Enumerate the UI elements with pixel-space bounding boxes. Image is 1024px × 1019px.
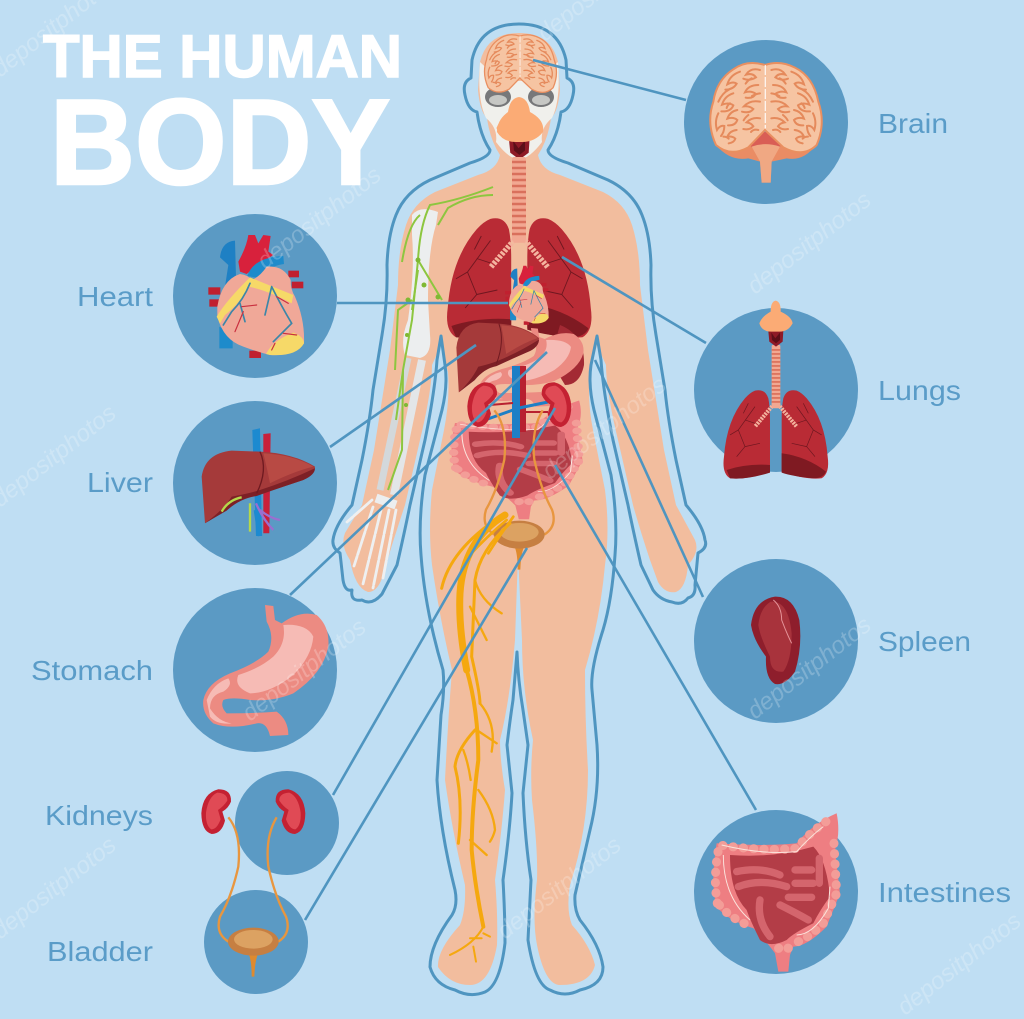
mini heart xyxy=(505,266,549,325)
icon: liver xyxy=(202,428,315,536)
arm skeleton xyxy=(347,209,438,588)
watermark: depositphotos xyxy=(742,186,876,300)
watermark: depositphotos xyxy=(742,611,876,725)
title: BODY xyxy=(50,74,390,210)
icon circles xyxy=(173,40,858,994)
label: Bladder: Bladder xyxy=(47,936,153,967)
watermark: depositphotos xyxy=(252,161,386,275)
label: Liver: Liver xyxy=(87,467,153,498)
icon: kidneys and bladder xyxy=(201,789,305,977)
icon: spleen xyxy=(751,597,800,684)
mini intestines xyxy=(452,400,583,519)
label: Intestines: Intestines xyxy=(878,877,1011,908)
body figure xyxy=(333,24,706,995)
body outline xyxy=(333,24,706,995)
major blood vessels xyxy=(485,366,548,438)
body skin xyxy=(343,33,696,985)
icon: stomach xyxy=(203,605,329,736)
leader lines xyxy=(290,60,756,920)
icon: brain xyxy=(710,63,822,183)
mini lungs and airway xyxy=(447,97,591,338)
watermark: depositphotos xyxy=(492,831,626,945)
label: Heart: Heart xyxy=(77,281,153,312)
icon: intestines xyxy=(713,813,840,972)
watermark: depositphotos xyxy=(237,613,371,727)
watermark: depositphotos xyxy=(537,371,671,485)
label: Spleen: Spleen xyxy=(878,626,971,657)
trachea overlay xyxy=(512,157,526,241)
label: Lungs: Lungs xyxy=(878,375,961,406)
label: Brain: Brain xyxy=(878,108,948,139)
larynx overlay xyxy=(497,97,543,142)
mini liver xyxy=(456,323,539,392)
label: Kidneys: Kidneys xyxy=(45,800,153,831)
skull xyxy=(479,62,559,160)
lymph vessels xyxy=(388,187,493,490)
mini urinary tract xyxy=(467,382,571,570)
sciatic nerve xyxy=(442,515,513,962)
label: Stomach: Stomach xyxy=(31,655,153,686)
icon: lungs xyxy=(723,301,828,479)
mini stomach xyxy=(480,328,584,407)
mini spleen xyxy=(550,325,584,385)
mini brain xyxy=(484,35,556,92)
icon: heart xyxy=(208,235,304,358)
title: THE HUMAN xyxy=(43,23,402,90)
